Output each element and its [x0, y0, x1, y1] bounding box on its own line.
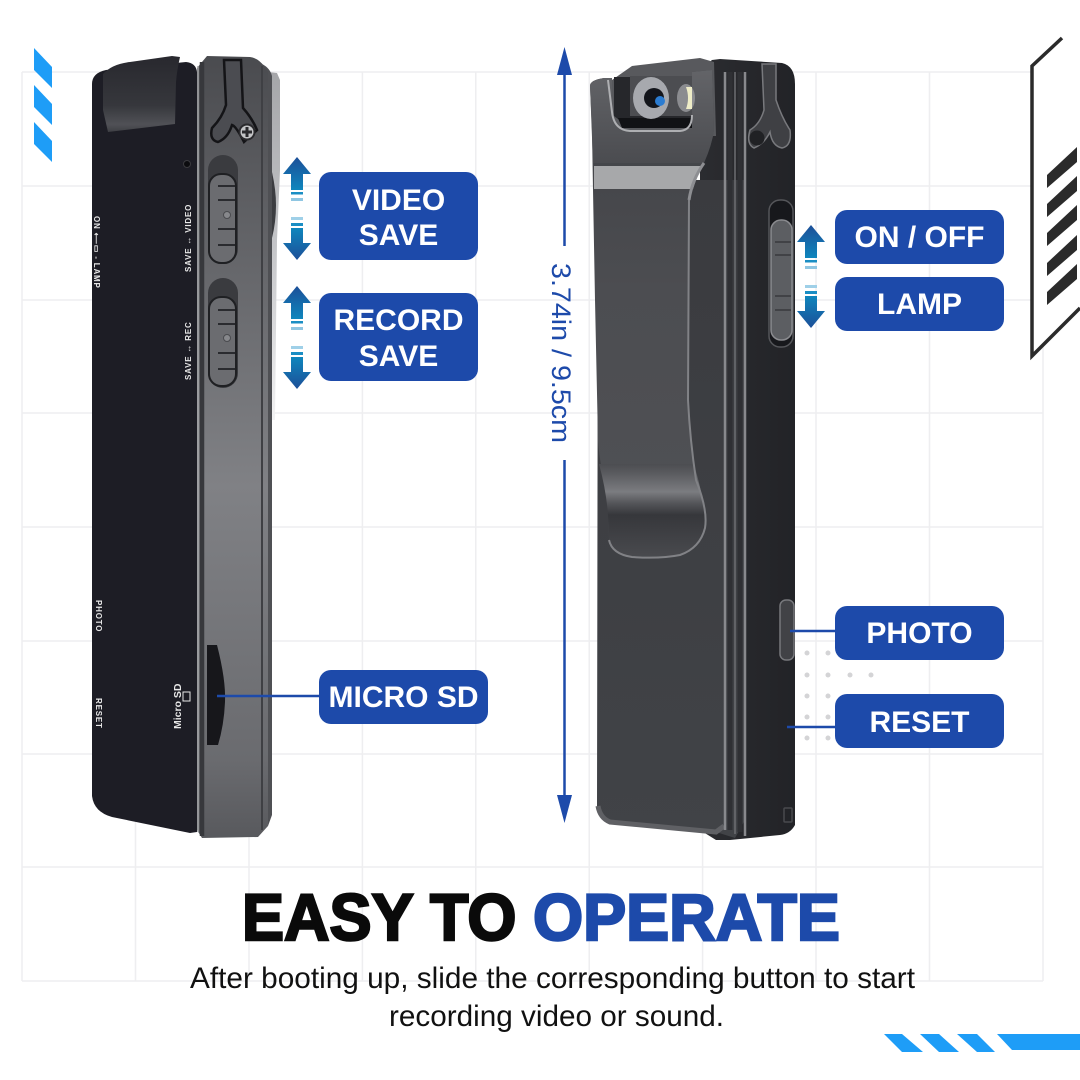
- callout: lamp: [835, 277, 1004, 331]
- callout: micro sd: MICRO SD: [328, 681, 478, 714]
- arrows: on off switch: [797, 225, 825, 328]
- dimension line: [546, 47, 576, 823]
- slide switch: record: [208, 278, 238, 388]
- callout: on off: [835, 210, 1004, 264]
- photo button: [780, 600, 794, 660]
- device printing: ON ⟵▭ - LAMP: [92, 216, 101, 289]
- callout: reset: RESET: [869, 706, 970, 739]
- callout: video save: [319, 172, 478, 260]
- usb port detail: [784, 808, 792, 822]
- device printing: Micro SD: [172, 683, 184, 729]
- subtitle: After booting up, slide the corresponding button to start: [190, 962, 916, 995]
- title: [242, 880, 840, 954]
- microphone dot: [184, 160, 190, 168]
- device printing: SAVE ↔ REC: [184, 321, 193, 380]
- callout: micro sd: [217, 670, 488, 724]
- arrows: record switch: [283, 286, 311, 389]
- decoration: dark frame top right: [1032, 38, 1080, 356]
- decoration: dot matrix: [804, 650, 874, 740]
- camera window: [608, 76, 695, 131]
- callout: reset: [787, 694, 1004, 748]
- callout: photo: PHOTO: [866, 617, 973, 650]
- device printing: PHOTO: [94, 600, 103, 632]
- clip mount: [749, 64, 790, 148]
- rear body: [700, 59, 795, 840]
- device printing: RESET: [94, 698, 103, 729]
- callout: video save: SAVE: [359, 219, 438, 252]
- arrows: video switch: [283, 157, 311, 260]
- slide switch: [769, 200, 793, 347]
- device printing: SAVE ↔ VIDEO: [184, 204, 193, 272]
- callout: lamp: LAMP: [877, 288, 962, 321]
- title: EASY TO: [242, 881, 516, 954]
- subtitle: [190, 962, 916, 1033]
- micro sd slot: [207, 645, 225, 745]
- callout: video save: VIDEO: [352, 184, 445, 217]
- callout: record save: [319, 293, 478, 381]
- subtitle: recording video or sound.: [389, 1000, 724, 1033]
- decoration: blue stripes bottom right: [884, 1034, 1080, 1052]
- dimension line: 3.74in / 9.5cm: [546, 263, 576, 443]
- clip mount and screw: [211, 60, 257, 142]
- device printing: [92, 204, 193, 729]
- callout: photo: [790, 606, 1004, 660]
- callout: on off: ON / OFF: [854, 221, 984, 254]
- product: camera, side view: [92, 56, 280, 838]
- head top behind window: [612, 58, 716, 136]
- decoration: blue stripes top left: [34, 48, 52, 162]
- rails: [725, 72, 745, 836]
- panel below clip: [597, 180, 745, 838]
- slide switch: video: [208, 155, 238, 264]
- product: camera, clip view: [590, 58, 795, 840]
- camera flap: [103, 56, 180, 132]
- callout: record save: RECORD: [333, 304, 464, 337]
- background grid: [22, 72, 1043, 981]
- callout: record save: SAVE: [359, 340, 438, 373]
- title: OPERATE: [533, 880, 840, 954]
- belt clip: [590, 70, 714, 557]
